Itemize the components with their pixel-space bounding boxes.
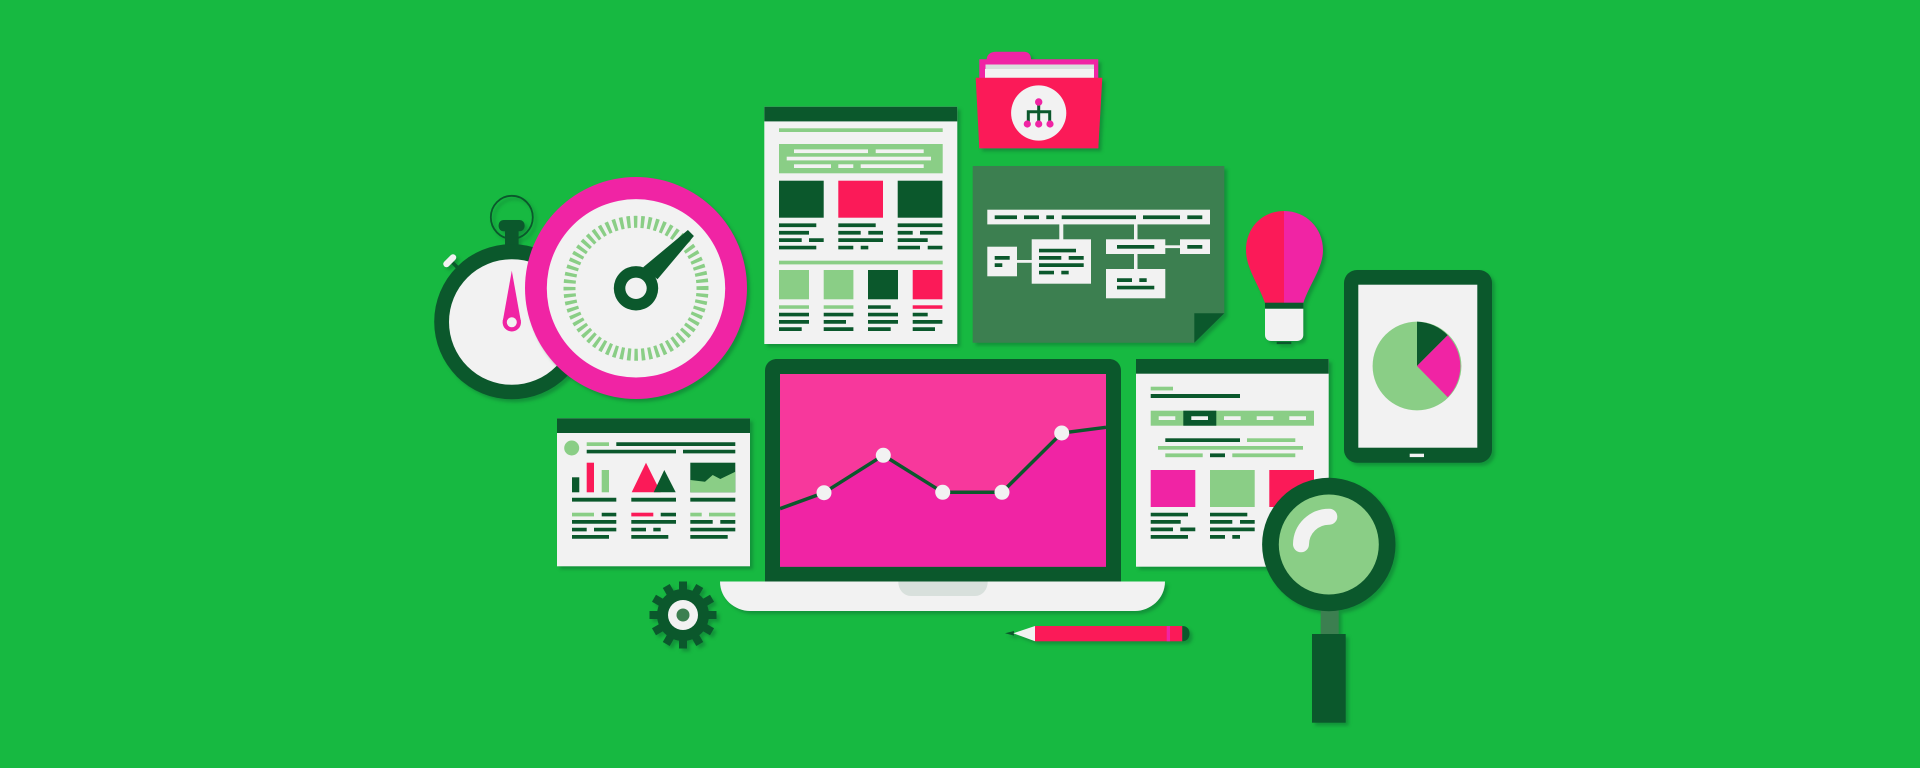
icon: light bulb — [1246, 211, 1323, 344]
icon: speed gauge — [525, 177, 747, 399]
icon: tablet with pie chart — [1344, 270, 1492, 463]
panel: wireframe document right — [1136, 359, 1329, 567]
area chart — [690, 463, 735, 492]
icon: pencil — [1005, 626, 1190, 641]
icon: magnifying glass — [1262, 478, 1396, 723]
icon: laptop — [720, 359, 1165, 611]
panel: dashboard document left — [557, 418, 750, 566]
triangle chart — [632, 463, 676, 492]
panel: report document top — [764, 107, 957, 344]
bar chart — [572, 463, 609, 492]
icon: stopwatch — [434, 196, 589, 399]
navigation bar — [1151, 411, 1314, 426]
panel: sitemap sticky note — [973, 166, 1224, 343]
icon: gear — [650, 582, 716, 648]
laptop base — [720, 582, 1165, 611]
line chart on laptop screen — [780, 374, 1106, 567]
icon: folder — [976, 52, 1102, 148]
pie chart — [1373, 322, 1461, 410]
